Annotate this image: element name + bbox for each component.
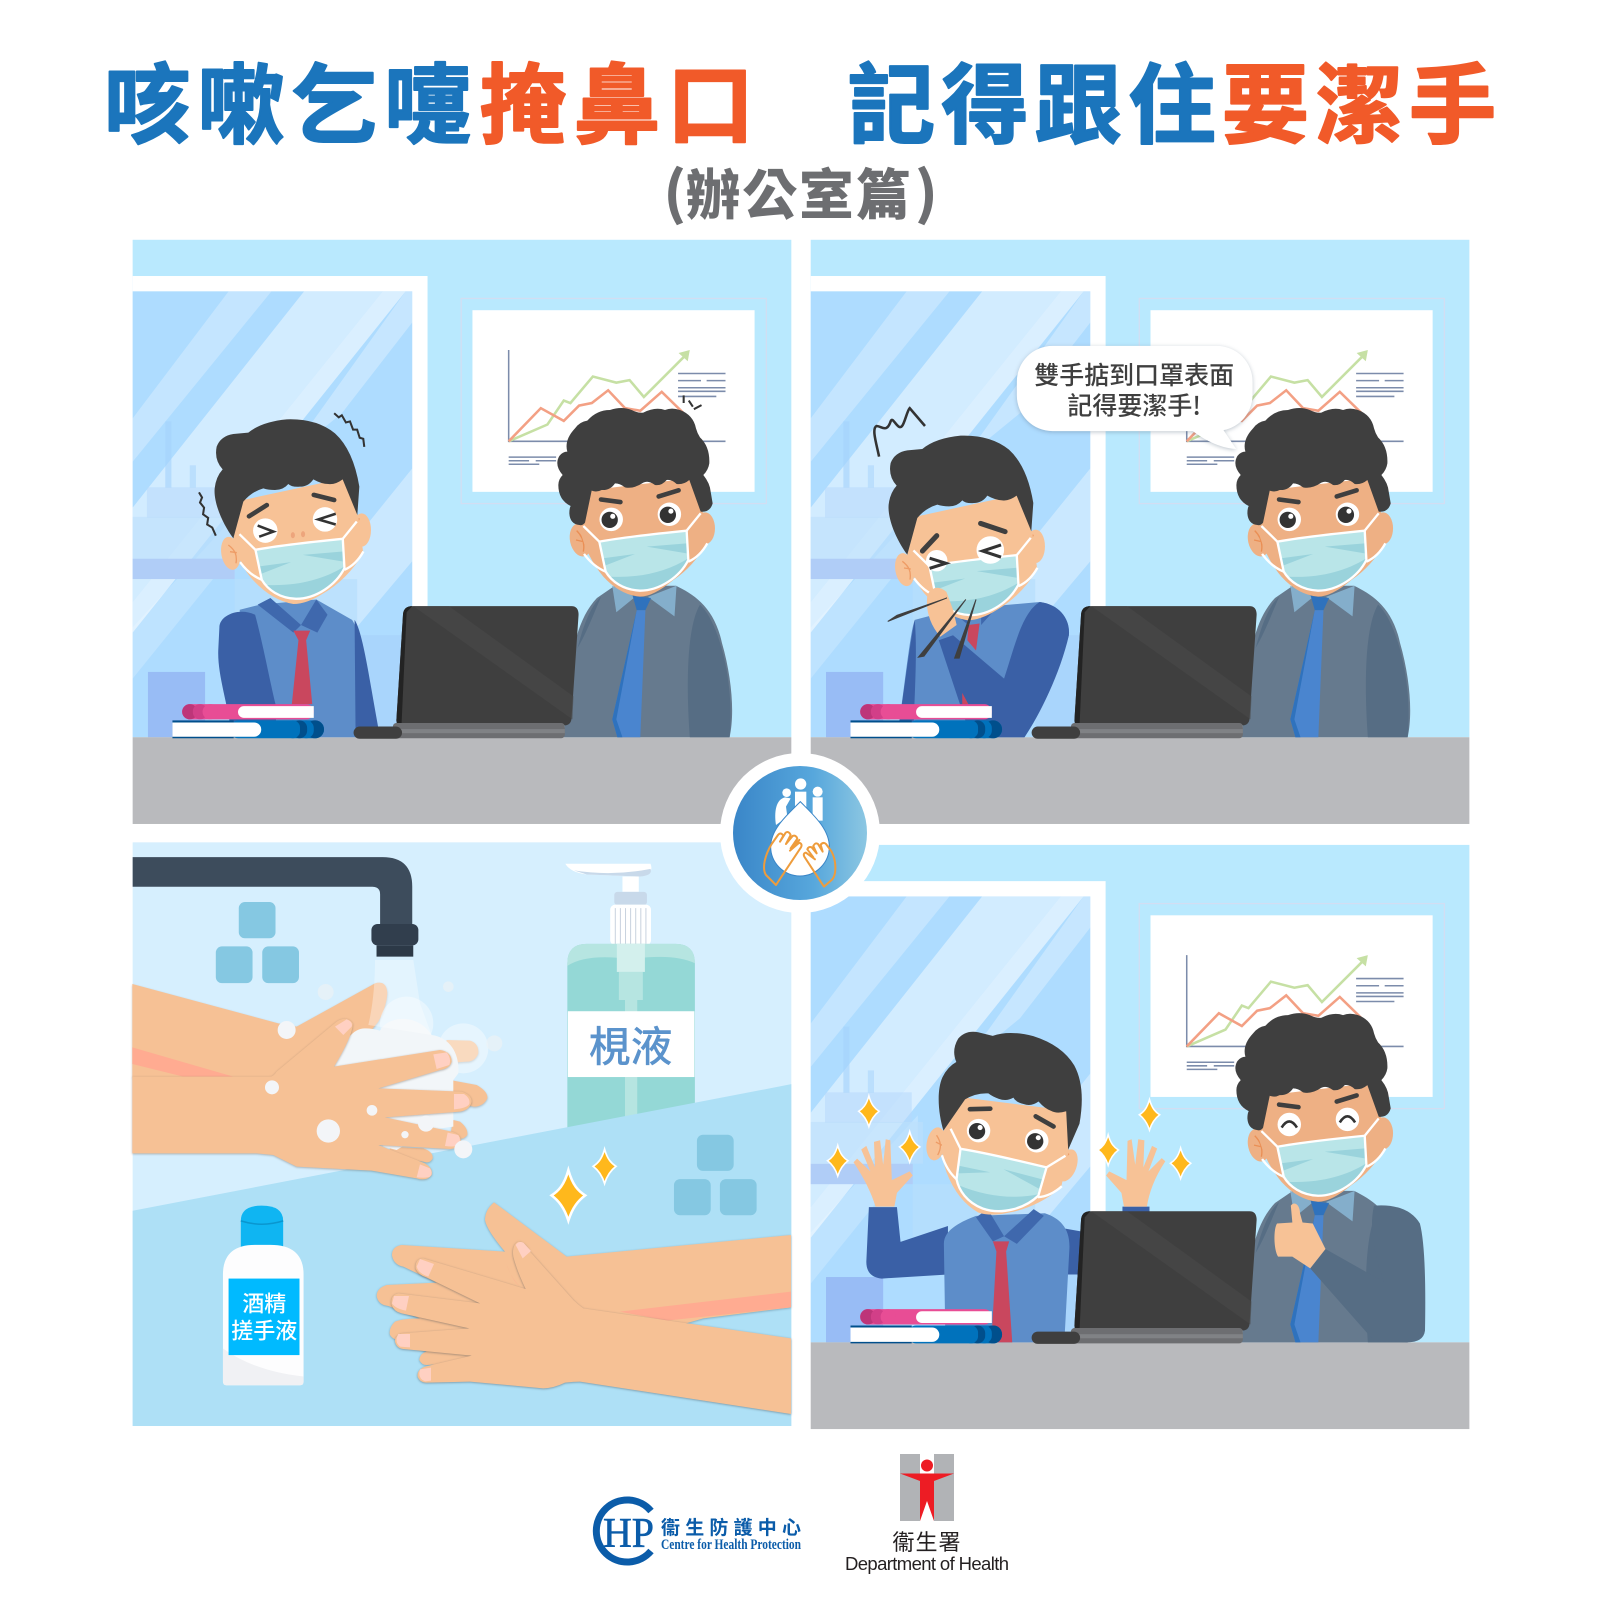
panel: remember to clean hands speech, top right [811, 240, 1469, 824]
speech bubble [1017, 346, 1253, 449]
books [851, 704, 1002, 738]
laptop [1032, 606, 1257, 739]
washing hands with foam [132, 960, 502, 1179]
alcohol hand rub bottle: 搓手液 [231, 1314, 297, 1345]
coughing man holding mask [874, 408, 1069, 737]
faucet [133, 857, 418, 957]
title: cough and sneeze cover nose and mouth: 咳嗽乞嚏 [104, 36, 478, 162]
panel: hands clean and thumbs up, bottom right [811, 845, 1469, 1429]
laptop [1032, 1211, 1257, 1344]
coworker speaking [1235, 408, 1410, 737]
alcohol hand rub bottle [223, 1206, 304, 1385]
subtitle: office edition: 辦公室篇 [686, 151, 913, 230]
sparkles [828, 1096, 1191, 1179]
books [851, 1309, 1002, 1343]
clean hands [377, 1202, 791, 1414]
books [172, 704, 324, 738]
title: cough and sneeze cover nose and mouth: 要潔手 [1222, 36, 1502, 162]
logo: Centre for Health Protection: 衞生防護中心 [661, 1513, 801, 1540]
logo: Department of Health: Department of Health [845, 1553, 1009, 1574]
panel: hand washing and sanitiser, bottom left [132, 842, 791, 1426]
lower blue surface [133, 1084, 791, 1426]
decorative tiles upper [216, 902, 299, 983]
alcohol hand rub bottle: 酒精 [242, 1288, 286, 1319]
speech bubble: 記得要潔手! [1067, 386, 1201, 422]
logo: Centre for Health Protection [596, 1500, 801, 1562]
title: cough and sneeze cover nose and mouth: 掩鼻口 [480, 36, 760, 162]
laptop [354, 606, 579, 739]
subtitle: office edition: ( [664, 149, 685, 230]
soap bottle: 梘液 [589, 1014, 672, 1075]
coworker thumbs up [1235, 1013, 1425, 1342]
coworker in grey vest [557, 395, 732, 737]
panel: coughing at office, top left [133, 240, 791, 824]
logo: Department of Health: 衞生署 [892, 1525, 962, 1557]
title: cough and sneeze cover nose and mouth [104, 36, 1502, 162]
tiles lower [674, 1135, 757, 1215]
logo: Centre for Health Protection: HP [603, 1511, 654, 1557]
title: cough and sneeze cover nose and mouth: 記得跟住 [848, 36, 1222, 162]
soap bottle [565, 864, 695, 1157]
logo: Centre for Health Protection: Centre for Health Protection [661, 1537, 801, 1553]
logo: Department of Health [845, 1454, 1009, 1574]
coughing man [199, 413, 380, 737]
speech bubble: 雙手掂到口罩表面 [1034, 356, 1234, 392]
happy man raising hands [854, 1012, 1165, 1342]
subtitle: office edition: ) [916, 149, 937, 230]
centre badge: hand hygiene icon [720, 753, 880, 913]
sparkles [552, 1149, 616, 1221]
